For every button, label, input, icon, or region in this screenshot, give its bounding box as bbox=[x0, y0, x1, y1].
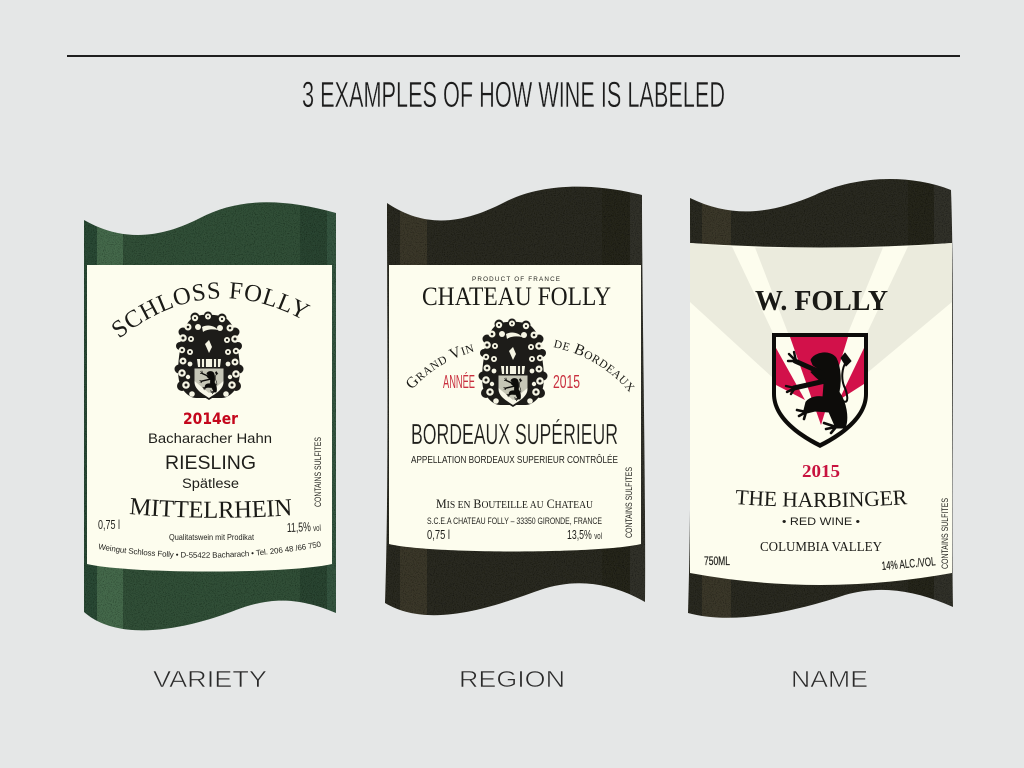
panel: region bottle bbox=[385, 186, 646, 616]
appellation: BORDEAUX SUPÉRIEUR bbox=[411, 418, 618, 451]
caption: variety: VARIETY bbox=[153, 666, 267, 692]
dark bottle body bbox=[385, 186, 646, 616]
variety: RIESLING bbox=[165, 453, 256, 474]
sunburst rays bbox=[690, 243, 952, 378]
panel: name bottle bbox=[688, 179, 953, 618]
caption: region: REGION bbox=[459, 666, 565, 692]
vintage year: 2015 bbox=[553, 372, 580, 392]
vintage word: ANNÉE bbox=[443, 372, 475, 392]
icon: coat of arms bbox=[174, 312, 244, 400]
quality text: Qualitatswein mit Prodikat bbox=[169, 532, 255, 542]
sulfites note: CONTAINS SULFITES bbox=[940, 498, 951, 569]
alcohol: 13,5% vol bbox=[567, 527, 602, 542]
title: 3 EXAMPLES OF HOW WINE IS LABELED bbox=[302, 74, 725, 115]
producer address: S.C.E.A CHATEAU FOLLY – 33350 GIRONDE, FRANCE bbox=[427, 516, 602, 527]
panel: variety bottle bbox=[84, 202, 336, 630]
wine name bbox=[735, 504, 908, 507]
alcohol: 14% ALC./VOL bbox=[881, 554, 936, 573]
estate name bbox=[119, 298, 331, 339]
top rule bbox=[67, 55, 960, 57]
crest lion bbox=[504, 378, 522, 401]
chateau name: CHATEAU FOLLY bbox=[422, 282, 611, 311]
wine type: • RED WINE • bbox=[782, 516, 860, 528]
producer address bbox=[98, 546, 324, 558]
crest lion bbox=[200, 371, 218, 394]
green bottle body bbox=[80, 190, 340, 640]
vineyard: Bacharacher Hahn bbox=[148, 430, 272, 446]
origin line: PRODUCT OF FRANCE bbox=[472, 276, 560, 283]
sulfites note: CONTAINS SULFITES bbox=[624, 467, 635, 538]
panel: variety bottle: SCHLOSS FOLLY bbox=[112, 282, 310, 338]
appellation detail: APPELLATION BORDEAUX SUPERIEUR CONTRÔLÉE bbox=[411, 453, 618, 466]
panel: variety bottle: MITTELRHEIN bbox=[130, 498, 291, 518]
bottling note: MIS EN BOUTEILLE AU CHATEAU bbox=[436, 497, 594, 511]
icon: coat of arms bbox=[478, 318, 548, 407]
label paper bbox=[690, 243, 952, 585]
vintage: 2015 bbox=[802, 461, 840, 481]
arc text right bbox=[553, 347, 630, 393]
volume: 750ML bbox=[704, 556, 730, 568]
appellation: COLUMBIA VALLEY bbox=[760, 540, 882, 555]
region bbox=[129, 514, 294, 518]
arc text left bbox=[412, 350, 480, 390]
dark bottle body bbox=[685, 165, 957, 635]
ripeness level: Spätlese bbox=[182, 476, 239, 491]
icon: shield with lion bbox=[772, 333, 868, 448]
panel: region bottle: GRAND VIN bbox=[406, 344, 474, 388]
volume: 0,75 l bbox=[427, 527, 450, 542]
label paper bbox=[87, 265, 332, 572]
label paper bbox=[389, 265, 641, 552]
volume: 0,75 l bbox=[98, 517, 120, 532]
alcohol: 11,5% vol bbox=[287, 519, 321, 535]
wine brand: W. FOLLY bbox=[755, 285, 888, 317]
panel: name bottle: THE HARBINGER bbox=[736, 490, 908, 507]
sulfites note: CONTAINS SULFITES bbox=[313, 437, 323, 507]
panel: variety bottle: Weingut Schloss Folly • D-55422 Bacharach • Tel. 206 48 /66 750 bbox=[98, 542, 321, 559]
vintage: 2014er bbox=[183, 409, 238, 428]
caption: name: NAME bbox=[791, 666, 868, 692]
panel: region bottle: DE BORDEAUX bbox=[554, 340, 635, 392]
